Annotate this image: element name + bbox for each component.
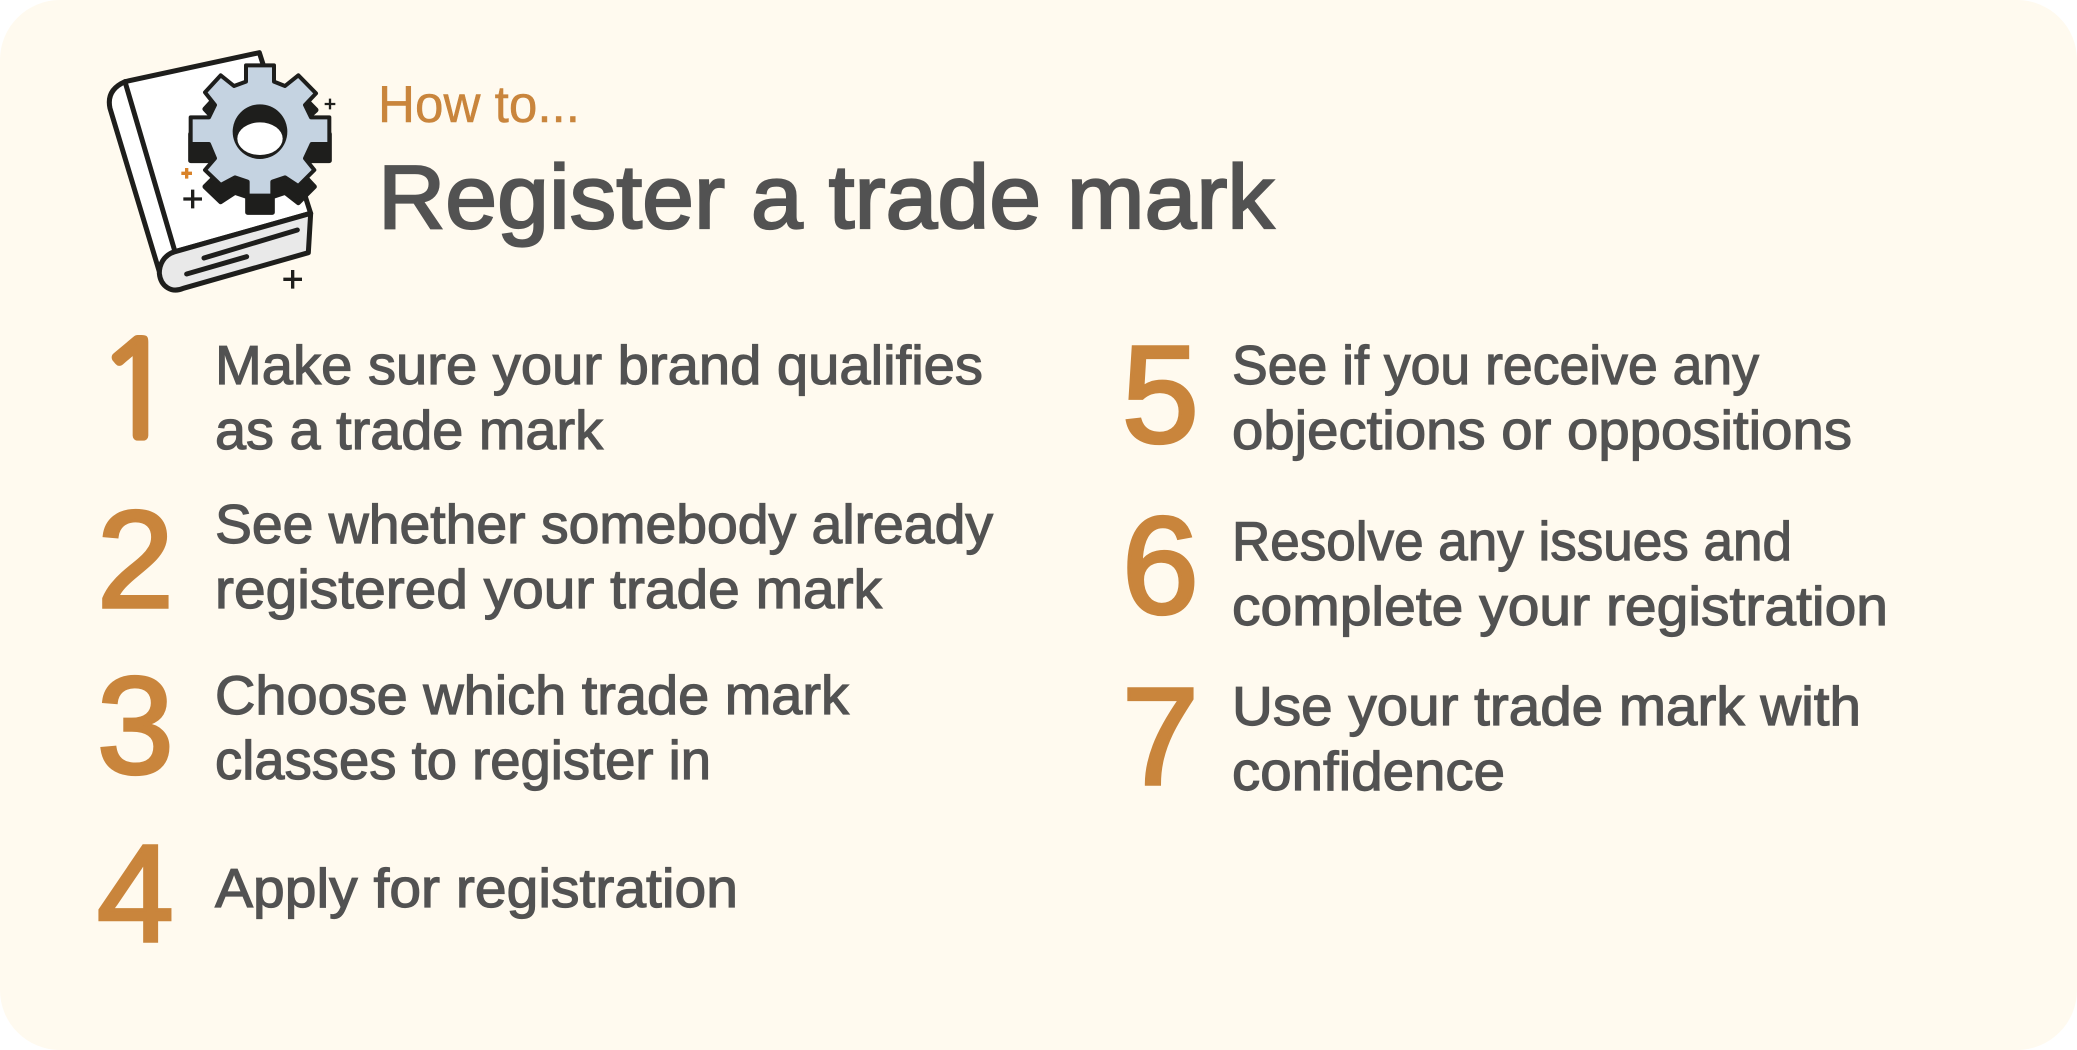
- step 3: classes to register in: [215, 729, 711, 791]
- step 7: 7: [1122, 660, 1199, 814]
- step 1: as a trade mark: [215, 399, 603, 461]
- step 3: 3: [97, 649, 174, 803]
- step 4: [97, 817, 738, 971]
- step 5: See if you receive any: [1232, 334, 1759, 396]
- step 7: confidence: [1232, 740, 1505, 802]
- step 2: registered your trade mark: [215, 558, 883, 620]
- title: Register a trade mark: [378, 148, 1275, 248]
- subtitle: How to...: [378, 76, 580, 134]
- gear hole: [233, 104, 287, 159]
- book pages: [159, 213, 311, 290]
- icon: book with gear: [109, 53, 335, 290]
- small sparkle: [325, 99, 335, 109]
- page lines: [187, 230, 297, 274]
- step 2: 2: [97, 483, 174, 637]
- gear: [191, 65, 329, 196]
- step 2: See whether somebody already: [215, 493, 993, 555]
- step 3: [97, 649, 849, 803]
- gear hole opening: [237, 122, 283, 155]
- step 6: complete your registration: [1232, 575, 1888, 637]
- step 1: Make sure your brand qualifies: [215, 334, 983, 396]
- step 1: 1: [96, 324, 177, 457]
- step 5: [1122, 318, 1852, 472]
- gear shadow: [191, 82, 329, 212]
- step 4: Apply for registration: [215, 857, 738, 919]
- step 6: Resolve any issues and: [1232, 510, 1792, 572]
- step 6: 6: [1122, 489, 1199, 643]
- step 7: [1122, 660, 1861, 814]
- step 3: Choose which trade mark: [215, 664, 849, 726]
- step 7: Use your trade mark with: [1232, 675, 1861, 737]
- sparkle marks: [181, 168, 192, 179]
- book spine edge: [125, 82, 175, 252]
- step 5: objections or oppositions: [1232, 399, 1852, 461]
- step 1: [96, 324, 983, 461]
- step 6: [1122, 489, 1888, 643]
- step 2: [97, 483, 993, 637]
- step 4: 4: [97, 817, 174, 971]
- book cover: [109, 53, 311, 272]
- step 5: 5: [1122, 318, 1199, 472]
- black sparkles: [183, 190, 302, 289]
